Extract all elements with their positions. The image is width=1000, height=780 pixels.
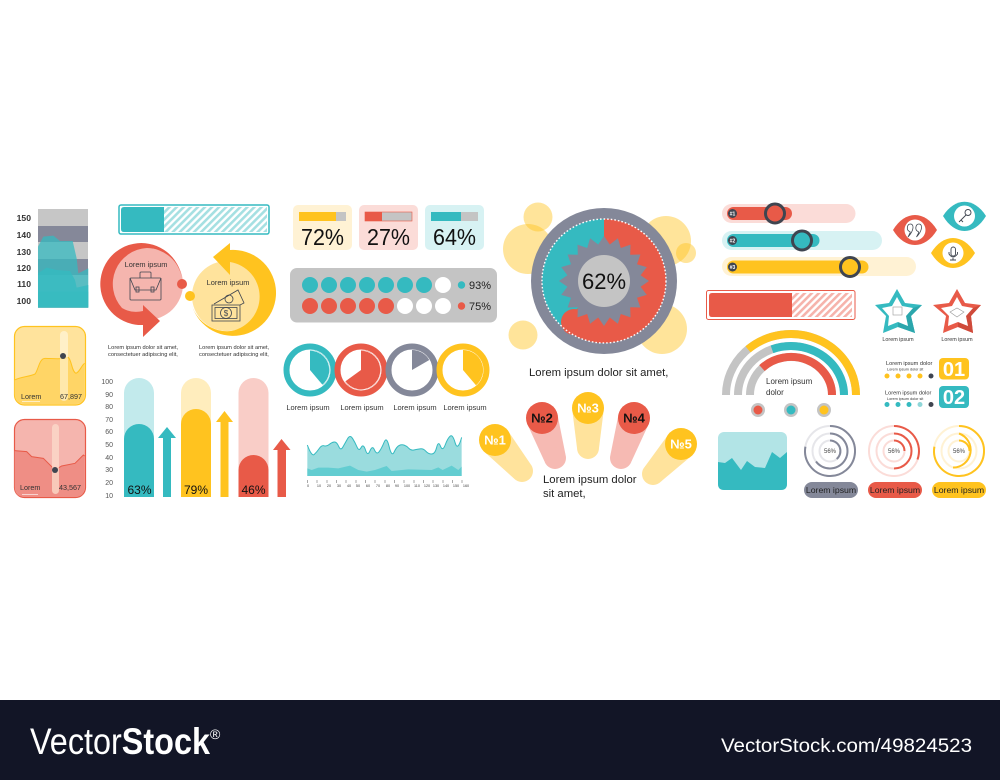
star badge: red: Lorem ipsum: [941, 337, 973, 343]
slider 1: #1: [730, 212, 735, 218]
y axis labels: 60: [105, 429, 113, 436]
stacked band chart: 150: [17, 213, 31, 223]
label: money circle: Lorem ipsum: [207, 278, 249, 287]
area chart: 80: [386, 484, 390, 488]
list item 01: 01: [943, 359, 965, 381]
panel: dot rows: [290, 268, 497, 322]
area chart: 140: [443, 484, 449, 488]
footer bar: [0, 700, 1000, 780]
gauge label: Lorem ipsum: [766, 377, 813, 386]
list item 02: [884, 386, 969, 409]
y axis labels: 40: [105, 455, 113, 462]
bar: red 46%: [238, 378, 290, 497]
pie gauge: slate: Lorem ipsum: [393, 403, 437, 412]
stacked band chart: 140: [17, 230, 31, 240]
fan item №5: №5: [670, 436, 692, 452]
pill: yellow: Lorem ipsum: [934, 485, 984, 495]
area chart: 60: [366, 484, 370, 488]
stacked band chart: 120: [17, 263, 31, 273]
ring gauge: slate: 56%: [824, 449, 837, 455]
list item 02: Lorem ipsum dolor sit: [887, 397, 924, 401]
bar: red 46%: 46%: [241, 483, 266, 497]
area chart: 160: [463, 484, 469, 488]
area chart: 70: [376, 484, 380, 488]
gauge legend dots: [751, 403, 831, 417]
ring gauge: red: [869, 426, 919, 476]
fan item №5: [642, 428, 697, 485]
area chart: 130: [433, 484, 439, 488]
bubbles behind donut: [503, 202, 696, 354]
donut gauge 62%: [531, 208, 677, 354]
star badge: teal: Lorem ipsum: [882, 337, 914, 343]
stacked band chart: 110: [17, 279, 31, 289]
y axis labels: 90: [105, 392, 113, 399]
cycle diagram: briefcase: [100, 243, 187, 337]
gear: [559, 236, 649, 326]
label: briefcase circle: Lorem ipsum: [125, 260, 167, 269]
stat card: 27%: [359, 205, 418, 250]
footer bar: ®: [210, 726, 221, 742]
fan item №1: [479, 424, 533, 482]
pie gauge: red: Lorem ipsum: [340, 403, 384, 412]
pill: red: Lorem ipsum: [870, 485, 920, 495]
pill: slate: Lorem ipsum: [806, 485, 856, 495]
list item 02: Lorem ipsum dolor: [885, 390, 931, 396]
fan item №3: №3: [577, 400, 599, 416]
pill: red: [868, 482, 922, 498]
card: red stat: Lorem: [20, 483, 40, 492]
area chart: 90: [395, 484, 399, 488]
card: red stat: [14, 420, 86, 498]
y axis labels: 70: [105, 417, 113, 424]
stacked band chart: 100: [17, 296, 31, 306]
caption: donut: Lorem ipsum dolor sit amet,: [529, 367, 668, 379]
panel: dot rows: 93%: [469, 280, 491, 292]
area chart: 50: [356, 484, 360, 488]
pie gauge: red: [338, 346, 384, 412]
eye icon: microphone: [931, 238, 975, 268]
pie gauge: yellow: Lorem ipsum: [443, 403, 487, 412]
fan item №2: №2: [531, 410, 553, 426]
donut gauge 62%: 62%: [582, 269, 626, 294]
cycle diagram: money: [185, 243, 276, 336]
ring gauge: red: 56%: [888, 449, 901, 455]
slider 3: [722, 257, 916, 276]
fan item №1: №1: [484, 432, 506, 448]
progress bar: red: [706, 290, 855, 320]
area chart: 0: [307, 484, 309, 488]
list item 01: Lorem ipsum dolor sit: [887, 368, 924, 372]
list item 01: [884, 358, 969, 381]
fan item №2: [526, 402, 566, 469]
stat card: 27%: 27%: [367, 224, 410, 250]
eye icon: key: [943, 202, 986, 231]
progress bar: teal: [119, 205, 269, 234]
stat card: 72%: 72%: [301, 224, 344, 250]
area chart: [307, 436, 469, 488]
icon: banknotes: $: [224, 309, 229, 318]
area chart: 100: [404, 484, 410, 488]
pie gauge: teal: [286, 346, 334, 412]
ring gauge: yellow: [934, 426, 984, 476]
y axis labels: 20: [105, 480, 113, 487]
area chart: 120: [424, 484, 430, 488]
pill: yellow: [932, 482, 986, 498]
area chart: 10: [317, 484, 321, 488]
caption: fan: Lorem ipsum dolor: [543, 474, 637, 486]
star badge: red: [933, 289, 981, 343]
area chart: 40: [347, 484, 351, 488]
caption: left cycle: consectetuer adipiscing elit,: [108, 352, 178, 358]
bar: yellow 79%: [181, 378, 233, 497]
footer bar: VectorStock.com/49824523: [721, 736, 972, 757]
stat card: 72%: [293, 205, 352, 250]
list item 02: 02: [943, 387, 965, 409]
fan item №4: №4: [623, 410, 646, 426]
stat card: 64%: 64%: [433, 224, 476, 250]
caption: left cycle: Lorem ipsum dolor sit amet,: [108, 345, 179, 351]
ring gauge: slate: [805, 426, 855, 476]
area chart: 150: [453, 484, 459, 488]
area chart: 110: [414, 484, 420, 488]
y axis labels: [101, 379, 113, 500]
pill: slate: [804, 482, 858, 498]
card: yellow stat: Lorem: [21, 392, 41, 401]
y axis labels: 80: [105, 404, 113, 411]
bar: teal 63%: [124, 378, 176, 497]
ring gauge: yellow: 56%: [953, 449, 966, 455]
caption: right cycle: consectetuer adipiscing elit,: [199, 352, 269, 358]
card: yellow stat: [14, 326, 86, 405]
panel: dot rows: 75%: [469, 301, 491, 313]
list item 01: Lorem ipsum dolor: [886, 361, 932, 367]
star badge: teal: [875, 289, 922, 343]
stat card: 64%: [425, 205, 484, 250]
fan item №3: [572, 392, 604, 459]
y axis labels: 30: [105, 467, 113, 474]
card: red stat: 43,567: [59, 483, 81, 492]
panel: teal area tile: [718, 432, 787, 490]
card: yellow stat: 67,897: [60, 392, 82, 401]
pie gauge: yellow: [440, 346, 487, 412]
eye icon: quotes: [893, 215, 937, 245]
slider 3: #3: [730, 265, 735, 271]
pie gauge: slate: [388, 346, 437, 412]
stacked band chart: 130: [17, 247, 31, 257]
fan item №4: [610, 402, 650, 469]
y axis labels: 100: [101, 379, 113, 386]
logo wordmark: VectorStock: [30, 721, 210, 762]
slider 1: [722, 204, 856, 223]
caption: right cycle: Lorem ipsum dolor sit amet,: [199, 345, 270, 351]
caption: fan: sit amet,: [543, 488, 586, 500]
bar: teal 63%: 63%: [127, 483, 152, 497]
area chart: 30: [337, 484, 341, 488]
y axis labels: 10: [105, 493, 113, 500]
gauge label: dolor: [766, 388, 784, 397]
stacked band chart: [17, 209, 88, 308]
slider 2: [722, 231, 882, 250]
pie gauge: teal: Lorem ipsum: [286, 403, 330, 412]
icon: briefcase: [130, 272, 161, 300]
semicircle gauge: [726, 334, 856, 395]
bar: yellow 79%: 79%: [184, 483, 208, 497]
y axis labels: 50: [105, 442, 113, 449]
area chart: 20: [327, 484, 331, 488]
bar chart with arrows: [101, 378, 290, 500]
slider 2: #2: [730, 238, 735, 244]
